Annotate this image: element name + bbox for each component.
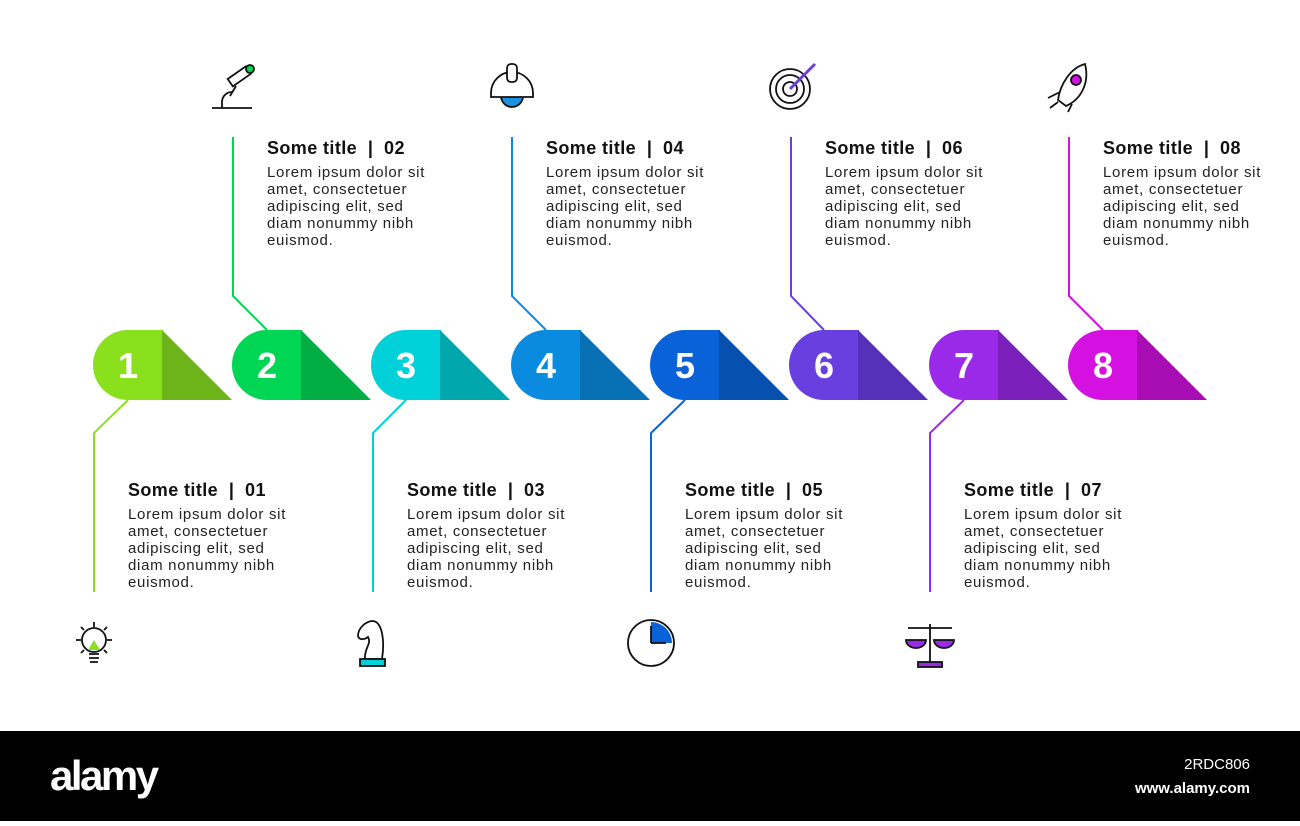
text 04: adipiscing elit, sed — [546, 198, 683, 215]
footer bar: 2RDC806 — [1184, 756, 1250, 773]
text 06: Lorem ipsum dolor sit — [825, 164, 983, 181]
text 02: Some title | 02 — [267, 138, 405, 158]
text 06: amet, consectetuer — [825, 181, 965, 198]
text 04: Lorem ipsum dolor sit — [546, 164, 704, 181]
text 03 — [407, 480, 565, 591]
text 04 — [546, 138, 704, 249]
marker 1 — [93, 330, 232, 400]
text 04: diam nonummy nibh — [546, 215, 693, 232]
text 05: euismod. — [685, 574, 751, 591]
marker 6: 6 — [814, 345, 834, 386]
step 4 — [491, 64, 704, 400]
marker 7 — [929, 330, 1068, 400]
text 08: diam nonummy nibh — [1103, 215, 1250, 232]
text 03: Lorem ipsum dolor sit — [407, 506, 565, 523]
text 01: amet, consectetuer — [128, 523, 268, 540]
icon: light bulb — [76, 622, 112, 662]
step 2 — [212, 65, 425, 400]
icon: scales — [906, 624, 954, 667]
text 03: adipiscing elit, sed — [407, 540, 544, 557]
text 07: Lorem ipsum dolor sit — [964, 506, 1122, 523]
text 07: diam nonummy nibh — [964, 557, 1111, 574]
text 03: diam nonummy nibh — [407, 557, 554, 574]
text 03: amet, consectetuer — [407, 523, 547, 540]
icon: chess knight — [358, 621, 385, 666]
text 06: Some title | 06 — [825, 138, 963, 158]
step 7 — [906, 330, 1122, 667]
marker 7: 7 — [954, 345, 974, 386]
step 6 — [770, 64, 983, 400]
marker 5: 5 — [675, 345, 695, 386]
text 02: amet, consectetuer — [267, 181, 407, 198]
marker 3 — [371, 330, 510, 400]
text 06: diam nonummy nibh — [825, 215, 972, 232]
text 02: euismod. — [267, 232, 333, 249]
text 06 — [825, 138, 983, 249]
footer bar: alamy — [50, 752, 160, 799]
text 04: euismod. — [546, 232, 612, 249]
marker 4: 4 — [536, 345, 556, 386]
text 08: Some title | 08 — [1103, 138, 1241, 158]
text 03: euismod. — [407, 574, 473, 591]
marker 4 — [511, 330, 650, 400]
text 08: adipiscing elit, sed — [1103, 198, 1240, 215]
text 01: euismod. — [128, 574, 194, 591]
text 02: Lorem ipsum dolor sit — [267, 164, 425, 181]
text 02 — [267, 138, 425, 249]
text 01: Some title | 01 — [128, 480, 266, 500]
step 3 — [358, 330, 565, 666]
text 08: Lorem ipsum dolor sit — [1103, 164, 1261, 181]
footer bar: www.alamy.com — [1134, 780, 1250, 797]
text 07: euismod. — [964, 574, 1030, 591]
marker 1: 1 — [118, 345, 138, 386]
text 06: adipiscing elit, sed — [825, 198, 962, 215]
text 04: amet, consectetuer — [546, 181, 686, 198]
text 07: Some title | 07 — [964, 480, 1102, 500]
text 02: diam nonummy nibh — [267, 215, 414, 232]
icon: microscope — [212, 65, 254, 108]
marker 8: 8 — [1093, 345, 1113, 386]
marker 2: 2 — [257, 345, 277, 386]
text 01: adipiscing elit, sed — [128, 540, 265, 557]
text 04: Some title | 04 — [546, 138, 684, 158]
marker 3: 3 — [396, 345, 416, 386]
text 01: Lorem ipsum dolor sit — [128, 506, 286, 523]
text 07 — [964, 480, 1122, 591]
text 06: euismod. — [825, 232, 891, 249]
icon: target — [770, 64, 815, 109]
text 05: Lorem ipsum dolor sit — [685, 506, 843, 523]
text 05: amet, consectetuer — [685, 523, 825, 540]
step 5 — [628, 330, 843, 666]
text 08: euismod. — [1103, 232, 1169, 249]
text 03: Some title | 03 — [407, 480, 545, 500]
text 05: diam nonummy nibh — [685, 557, 832, 574]
step 8 — [1048, 64, 1261, 400]
text 05: adipiscing elit, sed — [685, 540, 822, 557]
text 08: amet, consectetuer — [1103, 181, 1243, 198]
icon: helmet gear — [491, 64, 533, 107]
marker 2 — [232, 330, 371, 400]
text 05: Some title | 05 — [685, 480, 823, 500]
text 07: amet, consectetuer — [964, 523, 1104, 540]
text 01 — [128, 480, 286, 591]
step 1 — [76, 330, 286, 662]
marker 5 — [650, 330, 789, 400]
text 07: adipiscing elit, sed — [964, 540, 1101, 557]
text 05 — [685, 480, 843, 591]
icon: clock — [628, 620, 674, 666]
marker 6 — [789, 330, 928, 400]
footer bar — [0, 731, 1300, 821]
text 01: diam nonummy nibh — [128, 557, 275, 574]
text 02: adipiscing elit, sed — [267, 198, 404, 215]
icon: rocket — [1048, 64, 1086, 112]
marker 8 — [1068, 330, 1207, 400]
text 08 — [1103, 138, 1261, 249]
